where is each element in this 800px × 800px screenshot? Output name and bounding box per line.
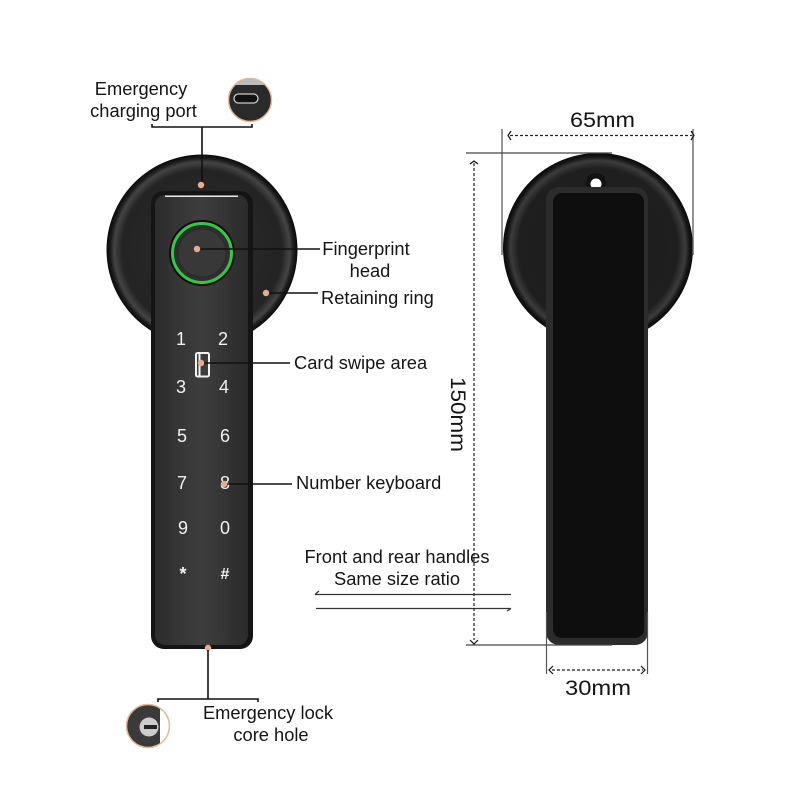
callout: emergency charging port: charging port (90, 100, 197, 121)
callout: emergency charging port: Emergency (95, 78, 188, 99)
dimension: 30mm: 30mm (565, 677, 631, 700)
number keypad: 9 (178, 518, 188, 538)
dimension: 30mm (546, 612, 648, 700)
rear screw hole (586, 173, 606, 193)
dimension: 65mm (502, 109, 694, 255)
number keypad: * (179, 564, 187, 584)
fingerprint sensor (169, 220, 235, 286)
number keypad: 2 (218, 329, 228, 349)
card swipe icon (196, 353, 209, 376)
callout: emergency charging port (90, 78, 252, 188)
number keypad: 5 (177, 426, 187, 446)
front handle (151, 191, 253, 649)
callout: emergency lock core hole: core hole (233, 724, 309, 745)
number keypad: # (221, 566, 230, 583)
dimension: 150mm: 150mm (446, 377, 469, 452)
rear retaining ring (503, 153, 693, 343)
callout: retaining ring: Retaining ring (321, 287, 434, 308)
number keypad: 8 (220, 473, 230, 493)
callout: fingerprint head: Fingerprint (322, 238, 410, 259)
callout: fingerprint head: head (350, 260, 390, 281)
rear lock product view (503, 153, 693, 645)
callout: number keyboard (221, 472, 441, 493)
number keypad: 1 (176, 329, 186, 349)
number keypad: 3 (176, 377, 186, 397)
front lock product view (106, 154, 298, 649)
dimension: 150mm (446, 153, 612, 645)
callout: card swipe area: Card swipe area (294, 352, 428, 373)
icon: lock core inset (126, 704, 172, 748)
note: front and rear handles: Front and rear handles (305, 546, 489, 567)
number keypad (176, 329, 230, 584)
callout: number keyboard: Number keyboard (296, 472, 441, 493)
number keypad: 4 (219, 377, 229, 397)
callout: retaining ring (263, 287, 434, 308)
icon: USB-C port inset (228, 78, 272, 122)
callout: emergency lock core hole (158, 645, 334, 745)
rear handle (546, 187, 648, 645)
front retaining ring (106, 154, 298, 346)
callout: card swipe area (198, 352, 428, 373)
number keypad: 7 (177, 473, 187, 493)
note: front and rear handles: Same size ratio (334, 568, 460, 589)
callout: fingerprint head (194, 238, 410, 281)
number keypad: 6 (220, 426, 230, 446)
callout: emergency lock core hole: Emergency lock (203, 702, 334, 723)
number keypad: 0 (220, 518, 230, 538)
note: front and rear handles (305, 546, 511, 611)
dimension: 65mm: 65mm (570, 109, 635, 132)
